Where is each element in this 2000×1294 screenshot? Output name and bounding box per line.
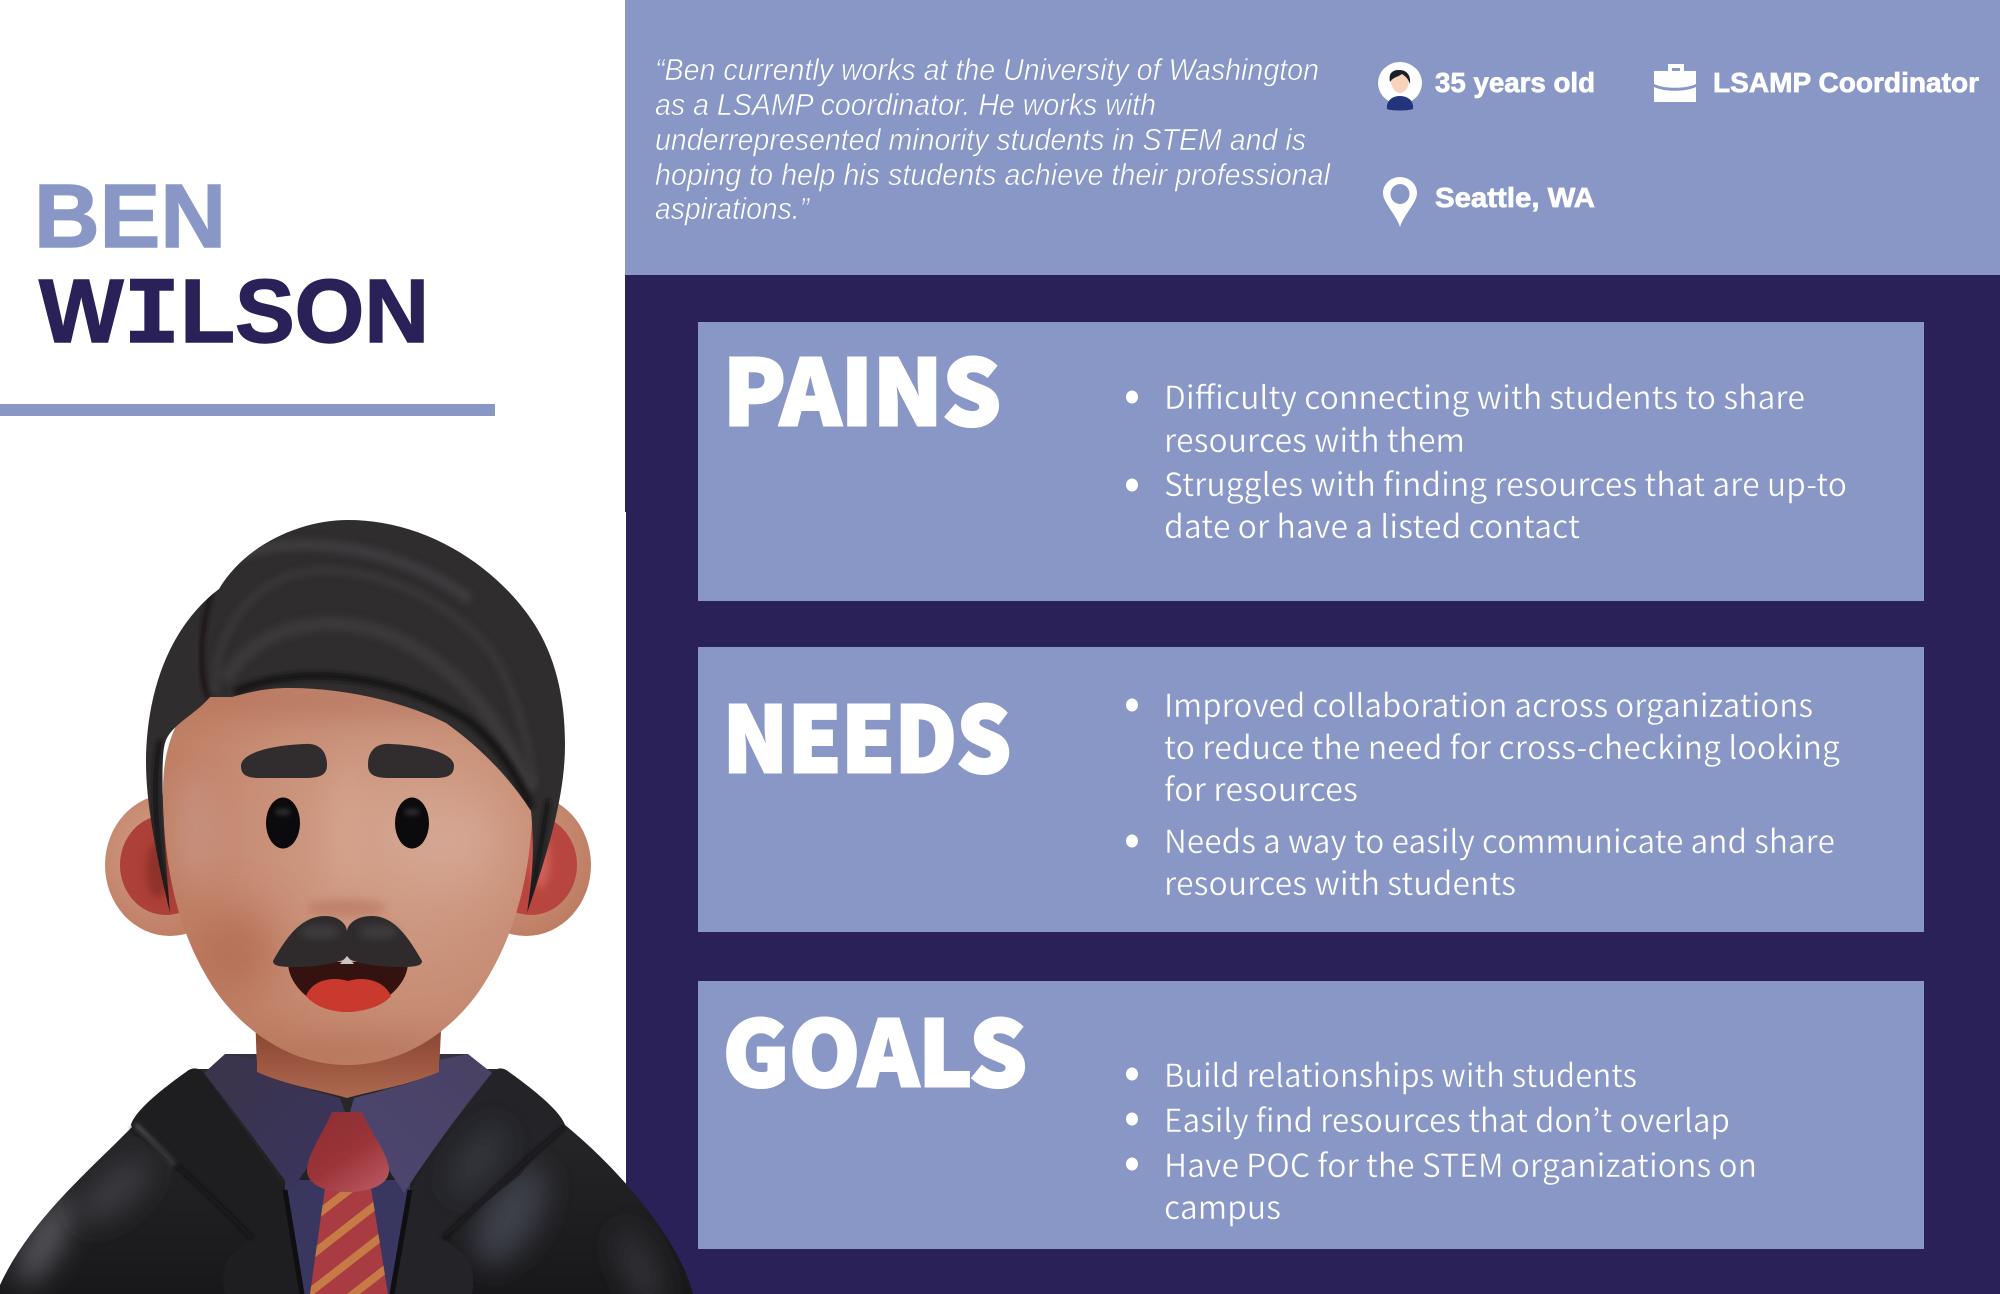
quote text block: aspirations.” — [655, 191, 811, 226]
icon: briefcase — [1654, 64, 1696, 102]
heading: needs: NEEDS — [723, 668, 1011, 798]
jacket body — [0, 1069, 693, 1294]
pains list: date or have a listed contact — [1164, 502, 1580, 548]
face — [163, 650, 533, 1065]
first name: BEN — [34, 167, 226, 267]
job title label: LSAMP Coordinator — [1713, 67, 1979, 98]
goals list — [1126, 1051, 1757, 1229]
panel: pains — [698, 321, 1924, 601]
pains list: Struggles with finding resources that are up-to — [1164, 460, 1847, 506]
hair — [146, 520, 565, 913]
goals list: Easily find resources that don’t overlap — [1164, 1096, 1730, 1142]
right eye — [395, 798, 429, 848]
needs list: Improved collaboration across organizations — [1164, 681, 1813, 727]
collar back — [215, 1054, 480, 1090]
needs list: resources with students — [1164, 859, 1516, 905]
name heading — [34, 167, 429, 371]
icon: location pin — [1383, 177, 1417, 227]
goals list: Build relationships with students — [1164, 1051, 1637, 1097]
left collar — [204, 1054, 345, 1190]
quote text block: as a LSAMP coordinator. He works with — [655, 87, 1156, 122]
pains list — [1126, 373, 1847, 548]
right eyebrow — [368, 744, 454, 778]
needs list: Needs a way to easily communicate and share — [1164, 817, 1835, 863]
moustache — [273, 916, 422, 967]
neck — [255, 1010, 442, 1098]
right ear — [461, 794, 591, 936]
goals list: Have POC for the STEM organizations on — [1164, 1141, 1757, 1187]
panel: goals — [698, 981, 1924, 1249]
mouth — [288, 962, 408, 1012]
quote text block: hoping to help his students achieve their professional — [655, 157, 1331, 192]
heading: pains: PAINS — [723, 321, 1001, 451]
illustration: 3D character portrait — [0, 520, 693, 1294]
left ear — [105, 794, 235, 936]
quote text block: “Ben currently works at the University of Washington — [655, 52, 1319, 87]
heading: goals: GOALS — [723, 982, 1027, 1112]
age label: 35 years old — [1435, 67, 1595, 98]
panel: needs — [698, 647, 1924, 932]
needs list: to reduce the need for cross-checking looking — [1164, 723, 1840, 769]
right collar — [350, 1054, 492, 1193]
quote text block: underrepresented minority students in STEM and is — [655, 122, 1306, 157]
needs list — [1126, 681, 1840, 905]
tie — [310, 1188, 388, 1294]
pains list: Difficulty connecting with students to share — [1164, 373, 1805, 419]
icon: person — [1378, 62, 1422, 110]
needs list: for resources — [1164, 765, 1358, 811]
panel: dark right background — [625, 275, 2000, 1294]
location label: Seattle, WA — [1435, 182, 1595, 213]
tie knot — [307, 1112, 389, 1192]
left eye — [266, 798, 300, 848]
left lapel — [131, 1068, 302, 1294]
right lapel — [392, 1068, 565, 1294]
panel: top summary band — [625, 0, 2000, 275]
left eyebrow — [241, 744, 327, 778]
last name: WILSON — [39, 262, 429, 371]
name underline — [0, 404, 495, 416]
pains list: resources with them — [1164, 416, 1465, 462]
shirt front — [285, 1180, 410, 1294]
quote text block — [655, 52, 1331, 226]
goals list: campus — [1164, 1183, 1281, 1229]
